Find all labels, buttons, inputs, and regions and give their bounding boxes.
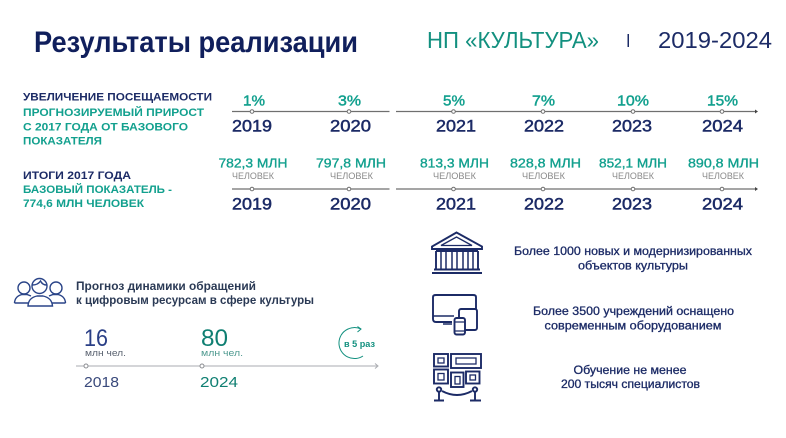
text: new and modernized objects: Более 1000 новых и модернизированных <box>514 246 752 258</box>
period: 2019-2024 <box>658 27 772 53</box>
timeline: visitors by year: ЧЕЛОВЕК <box>702 171 744 182</box>
timeline: visitors by year: 828,8 МЛН <box>510 156 581 170</box>
panel: 2017 results description: ИТОГИ 2017 ГОДА <box>23 170 131 182</box>
callout: 5x growth: в 5 раз <box>344 339 376 349</box>
timeline: visitors by year: 2021 <box>436 194 476 213</box>
digital resources heading: к цифровым ресурсам в сфере культуры <box>76 293 314 307</box>
timeline: visitors by year: ЧЕЛОВЕК <box>330 171 373 182</box>
timeline: visitors by year: 852,1 МЛН <box>599 156 667 170</box>
text: new and modernized objects <box>514 246 752 272</box>
text: equipped institutions: Более 3500 учреждений оснащено <box>533 306 734 318</box>
panel: 2017 results description: БАЗОВЫЙ ПОКАЗАТЕЛЬ - <box>23 183 172 196</box>
text: equipped institutions <box>533 306 734 332</box>
timeline: visitors by year: 782,3 МЛН <box>218 156 288 170</box>
timeline: digital requests <box>76 325 378 391</box>
icon: monitor and devices <box>433 295 477 334</box>
timeline: digital requests: 2024 <box>200 374 238 391</box>
timeline: visitors by year: ЧЕЛОВЕК <box>612 171 654 182</box>
panel: attendance growth description: ПОКАЗАТЕЛЯ <box>23 136 102 148</box>
panel: attendance growth description: С 2017 ГОДА ОТ БАЗОВОГО <box>23 122 188 134</box>
timeline: percent growth by year: 15% <box>707 92 738 110</box>
timeline: visitors by year: 813,3 МЛН <box>420 156 489 170</box>
panel: 2017 results description <box>23 170 172 210</box>
timeline: percent growth by year: 7% <box>532 92 555 110</box>
callout: 5x growth <box>339 326 376 359</box>
panel: attendance growth description: УВЕЛИЧЕНИЕ ПОСЕЩАЕМОСТИ <box>23 92 212 104</box>
timeline: visitors by year: 2024 <box>702 194 743 213</box>
timeline: percent growth by year <box>232 92 758 136</box>
project name: НП «КУЛЬТУРА» <box>427 27 599 53</box>
icon: gallery with rope barrier <box>434 354 481 400</box>
timeline: visitors by year: 2019 <box>232 194 272 213</box>
text: new and modernized objects: объектов культуры <box>578 260 688 272</box>
title: Результаты реализации <box>34 26 358 59</box>
icon: people <box>14 278 66 306</box>
timeline: visitors by year: 2020 <box>330 194 371 213</box>
timeline: digital requests: 16 <box>84 325 108 352</box>
timeline: visitors by year: ЧЕЛОВЕК <box>433 171 476 182</box>
timeline: percent growth by year: 2021 <box>436 117 476 136</box>
timeline: digital requests: млн чел. <box>85 348 126 359</box>
timeline: percent growth by year: 2024 <box>702 117 743 136</box>
timeline: visitors by year <box>218 156 759 213</box>
timeline: visitors by year: ЧЕЛОВЕК <box>232 171 274 182</box>
timeline: percent growth by year: 1% <box>243 92 265 110</box>
timeline: percent growth by year: 2019 <box>232 117 272 136</box>
timeline: visitors by year: 2022 <box>524 194 564 213</box>
text: specialists training: 200 тысяч специалистов <box>561 379 700 391</box>
timeline: percent growth by year: 3% <box>338 92 361 110</box>
timeline: digital requests: 80 <box>201 325 228 352</box>
timeline: visitors by year: ЧЕЛОВЕК <box>522 171 565 182</box>
panel: attendance growth description <box>23 92 212 148</box>
timeline: percent growth by year: 2023 <box>612 117 652 136</box>
digital resources heading: Прогноз динамики обращений <box>76 279 256 293</box>
timeline: visitors by year: 797,8 МЛН <box>316 156 386 170</box>
text: specialists training: Обучение не менее <box>574 365 686 377</box>
panel: attendance growth description: ПРОГНОЗИРУЕМЫЙ ПРИРОСТ <box>23 106 204 119</box>
timeline: visitors by year: 2023 <box>612 194 652 213</box>
timeline: percent growth by year: 5% <box>443 92 465 110</box>
timeline: percent growth by year: 10% <box>617 92 649 110</box>
icon: museum building <box>432 232 482 273</box>
timeline: visitors by year: 890,8 МЛН <box>688 156 759 170</box>
separator <box>628 34 629 47</box>
text: specialists training <box>561 365 700 391</box>
timeline: percent growth by year: 2022 <box>524 117 564 136</box>
panel: 2017 results description: 774,6 МЛН ЧЕЛОВЕК <box>23 198 144 210</box>
timeline: percent growth by year: 2020 <box>330 117 371 136</box>
text: equipped institutions: современным оборудованием <box>544 320 722 332</box>
digital resources heading <box>76 279 314 307</box>
timeline: digital requests: млн чел. <box>201 348 243 359</box>
timeline: digital requests: 2018 <box>84 374 119 391</box>
